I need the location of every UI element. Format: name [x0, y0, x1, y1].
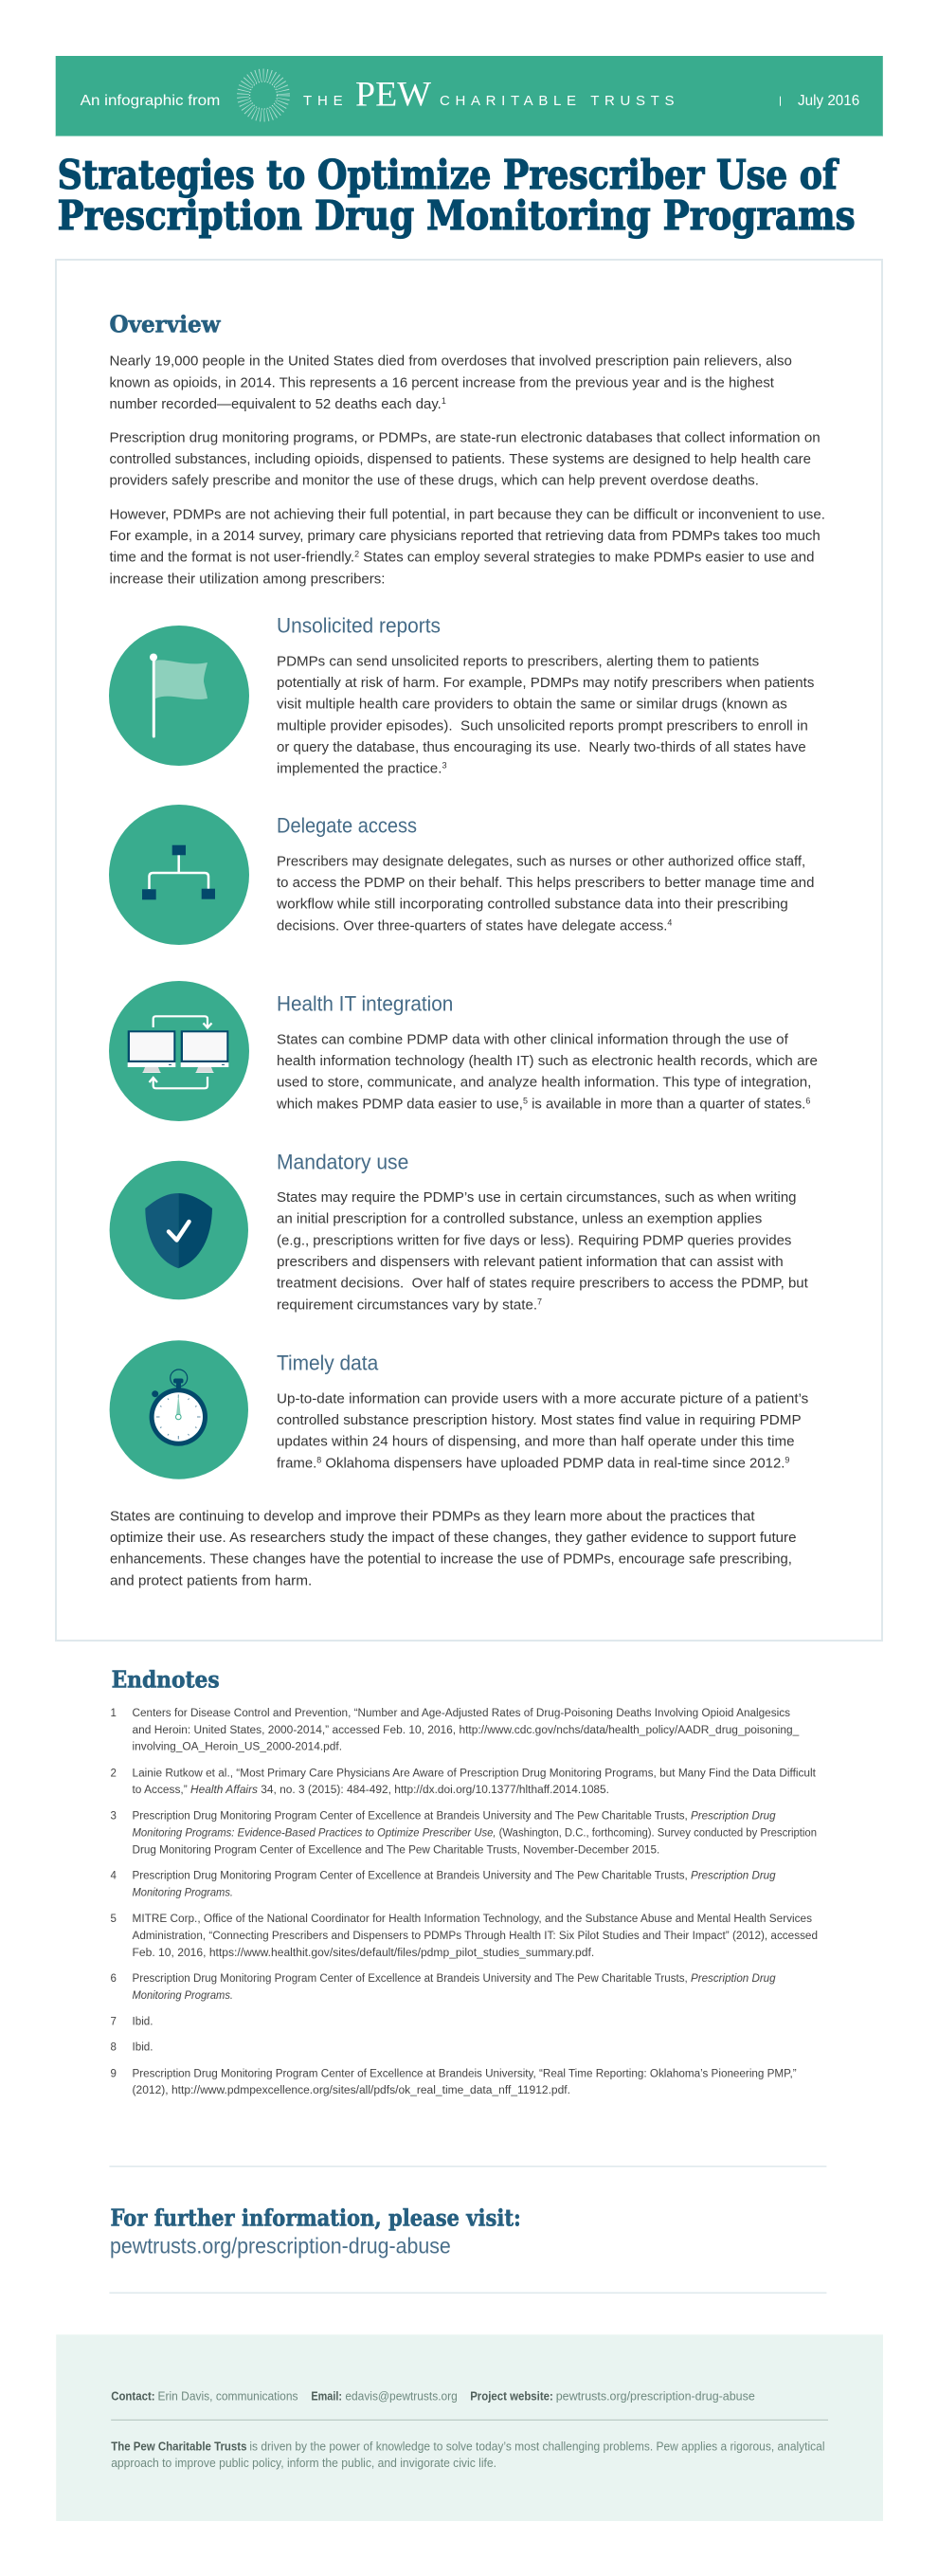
endnote 8: 8 — [110, 2042, 117, 2054]
overview paragraph 3: time and the format is not user-friendly. — [110, 550, 354, 566]
overview paragraph 2: controlled substances, including opioids, dispensed to patients. These systems are designed to help health care — [110, 451, 811, 467]
endnote 2 — [110, 1768, 817, 1796]
about Pew text: is driven by the power of knowledge to solve today’s most challenging problems. Pew applies a rigorous, analytical — [249, 2440, 824, 2453]
body text — [277, 653, 814, 777]
strategy: unsolicited reports — [109, 614, 814, 777]
body text: health information technology (health IT) such as electronic health records, which are — [277, 1053, 818, 1069]
body text: updates within 24 hours of dispensing, and more than half operate under this time — [277, 1434, 794, 1450]
icon: flag — [109, 626, 249, 766]
body text — [277, 1390, 808, 1471]
overview paragraph 2: Prescription drug monitoring programs, or PDMPs, are state-run electronic databases that collect information on — [110, 429, 821, 445]
icon: shield with check — [110, 1161, 248, 1299]
contact line: pewtrusts.org/prescription-drug-abuse — [556, 2389, 755, 2403]
closing paragraph: enhancements. These changes have the potential to increase the use of PDMPs, encourage safe prescribing, — [110, 1551, 792, 1568]
body text: used to store, communicate, and analyze health information. This type of integration, — [277, 1075, 811, 1091]
body text: multiple provider episodes). Such unsolicited reports prompt prescribers to enroll in — [277, 717, 808, 734]
endnote 2: Lainie Rutkow et al., “Most Primary Care Physicians Are Aware of Prescription Drug Monitoring Programs, but Many Find the Data Difficult — [133, 1768, 817, 1779]
body text: 9 — [785, 1455, 789, 1464]
further information block — [110, 2204, 521, 2258]
endnote 4: Monitoring Programs. — [133, 1888, 233, 1899]
further information block: pewtrusts.org/prescription-drug-abuse — [110, 2233, 451, 2258]
contact line: Project website: — [470, 2389, 553, 2403]
endnote 5: 5 — [110, 1914, 117, 1925]
heading: endnotes: Endnotes — [112, 1666, 220, 1694]
endnote 4: 4 — [110, 1871, 117, 1882]
endnote 1: involving_OA_Heroin_US_2000-2014.pdf. — [133, 1742, 342, 1753]
heading: Mandatory use — [277, 1151, 408, 1174]
closing paragraph: and protect patients from harm. — [110, 1572, 312, 1588]
overview paragraph 3 — [110, 506, 825, 587]
overview paragraph 3: However, PDMPs are not achieving their full potential, in part because they can be difficult or inconvenient to use. — [110, 506, 825, 522]
body text: 8 — [316, 1455, 321, 1464]
endnote 3: Drug Monitoring Program Center of Excellence and The Pew Charitable Trusts, November-December 2015. — [133, 1844, 659, 1856]
body text: 6 — [805, 1096, 810, 1105]
body text: PDMPs can send unsolicited reports to prescribers, alerting them to patients — [277, 653, 759, 669]
endnote 6: Prescription Drug Monitoring Program Center of Excellence at Brandeis University and The Pew Charitable Trusts, Prescription Drug — [133, 1973, 776, 1985]
endnote 1: 1 — [110, 1708, 117, 1719]
Pew wordmark — [303, 76, 675, 114]
endnote 1: Centers for Disease Control and Prevention, “Number and Age-Adjusted Rates of Drug-Poisoning Deaths Involving Opioid Analgesics — [133, 1708, 790, 1719]
body text: or query the database, thus encouraging its use. Nearly two-thirds of all states have — [277, 739, 806, 755]
endnote 8 — [110, 2042, 153, 2054]
header banner — [56, 56, 883, 136]
body text: to access the PDMP on their behalf. This helps prescribers to better manage time and — [277, 875, 814, 891]
endnote 8: Ibid. — [133, 2042, 153, 2054]
endnote 9: 9 — [110, 2068, 117, 2079]
overview paragraph 1: number recorded—equivalent to 52 deaths each day. — [110, 396, 443, 412]
overview paragraph 2: providers safely prescribe and monitor the use of these drugs, which can help prevent overdose deaths. — [110, 473, 759, 489]
closing paragraph: optimize their use. As researchers study the impact of these changes, they gather evidence to support future — [110, 1530, 796, 1546]
body text — [276, 853, 814, 934]
strategy: health IT integration — [109, 981, 818, 1121]
endnote 5: MITRE Corp., Office of the National Coordinator for Health Information Technology, and the Substance Abuse and Mental Health Services — [133, 1914, 812, 1925]
body text: Up-to-date information can provide users with a more accurate picture of a patient’s — [277, 1390, 808, 1406]
banner intro text: An infographic from — [81, 93, 220, 109]
banner date: July 2016 — [798, 93, 859, 109]
footer panel — [56, 2334, 883, 2521]
endnote 2: 2 — [110, 1768, 117, 1779]
body text: Oklahoma dispensers have uploaded PDMP data in real-time since 2012. — [321, 1455, 785, 1471]
body text — [276, 1031, 818, 1112]
body text: decisions. Over three-quarters of states have delegate access. — [277, 917, 671, 934]
about Pew text: The Pew Charitable Trusts — [111, 2440, 247, 2453]
about Pew text — [111, 2440, 824, 2470]
icon: org chart — [109, 805, 249, 945]
body text: 7 — [537, 1297, 542, 1306]
Pew wordmark: CHARITABLE TRUSTS — [440, 93, 675, 109]
endnote 2: to Access,” Health Affairs 34, no. 3 (2015): 484-492, http://dx.doi.org/10.1377/hlthaff.2014.1085. — [133, 1785, 609, 1796]
body text: States can combine PDMP data with other clinical information through the use of — [277, 1031, 789, 1047]
body text: (e.g., prescriptions written for five days or less). Requiring PDMP queries provides — [277, 1232, 791, 1248]
Pew wordmark: PEW — [355, 76, 431, 114]
overview paragraph 2 — [110, 429, 821, 489]
endnote 1: and Heroin: United States, 2000-2014,” accessed Feb. 10, 2016, http://www.cdc.gov/nchs/data/health_policy/AADR_drug_poisoning_ — [133, 1725, 800, 1736]
endnote 4: Prescription Drug Monitoring Program Center of Excellence at Brandeis University and The Pew Charitable Trusts, Prescription Drug — [133, 1871, 776, 1882]
endnote 3 — [110, 1810, 817, 1856]
overview paragraph 3: 2 — [354, 550, 359, 559]
heading: Health IT integration — [277, 992, 453, 1016]
endnote 9 — [110, 2068, 797, 2096]
contact line: Contact: — [111, 2389, 155, 2403]
overview paragraph 1: known as opioids, in 2014. This represents a 16 percent increase from the previous year and is the highest — [110, 374, 775, 390]
endnote 6 — [110, 1973, 776, 2002]
body text: controlled substance prescription history. Most states find value in requiring PDMP — [277, 1412, 802, 1428]
body text: frame. — [277, 1455, 317, 1471]
body text: implemented the practice. — [277, 761, 440, 777]
endnote 6: Monitoring Programs. — [133, 1990, 233, 2002]
endnote 4 — [110, 1871, 776, 1899]
overview paragraph 3: States can employ several strategies to make PDMPs easier to use and — [359, 550, 814, 566]
contact line: Email: — [311, 2389, 342, 2403]
endnote 5: Administration, “Connecting Prescribers and Dispensers to PDMPs Through Health IT: Six Pilot Studies and Their Impact” (2012), accessed — [133, 1931, 818, 1942]
icon: stopwatch — [110, 1340, 248, 1479]
contact line: edavis@pewtrusts.org — [345, 2389, 458, 2403]
heading: overview: Overview — [110, 311, 222, 338]
endnote 6: 6 — [110, 1973, 117, 1985]
endnote 9: Prescription Drug Monitoring Program Center of Excellence at Brandeis University, “Real Time Reporting: Oklahoma’s Pioneering PMP,” — [133, 2068, 797, 2079]
strategy: mandatory use — [110, 1151, 809, 1313]
body text: treatment decisions. Over half of states require prescribers to access the PDMP, but — [277, 1276, 809, 1292]
strategy: timely data — [110, 1340, 808, 1479]
endnote 9: (2012), http://www.pdmpexcellence.org/sites/all/pdfs/ok_real_time_data_nff_11912.pdf. — [133, 2085, 570, 2096]
title — [58, 152, 856, 240]
body text: 3 — [442, 761, 447, 771]
body text: visit multiple health care providers to obtain the same or similar drugs (known as — [277, 697, 787, 713]
endnote 7: Ibid. — [133, 2016, 153, 2027]
body text: an initial prescription for a controlled substance, unless an exemption applies — [277, 1211, 762, 1227]
endnote 3: 3 — [110, 1810, 117, 1822]
strategy: delegate access — [109, 805, 814, 945]
overview paragraph 3: increase their utilization among prescribers: — [110, 571, 385, 587]
endnote 3: Prescription Drug Monitoring Program Center of Excellence at Brandeis University and The Pew Charitable Trusts, Prescription Drug — [133, 1810, 776, 1822]
body text: 4 — [667, 917, 672, 927]
endnotes section — [110, 1666, 818, 2096]
body text: potentially at risk of harm. For example, PDMPs may notify prescribers when patients — [277, 675, 814, 691]
endnote 5 — [110, 1914, 818, 1959]
heading: Timely data — [277, 1351, 379, 1374]
body text: is available in more than a quarter of states. — [528, 1096, 805, 1112]
contact line — [111, 2389, 755, 2403]
closing paragraph: States are continuing to develop and improve their PDMPs as they learn more about the practices that — [110, 1508, 755, 1524]
endnote 7 — [110, 2016, 153, 2027]
body text: Prescribers may designate delegates, such as nurses or other authorized office staff, — [277, 853, 805, 869]
further information block: For further information, please visit: — [110, 2204, 521, 2231]
overview paragraph 1: Nearly 19,000 people in the United States died from overdoses that involved prescription pain relievers, also — [110, 354, 792, 370]
body text: which makes PDMP data easier to use, — [277, 1096, 525, 1112]
overview paragraph 1: 1 — [442, 396, 446, 406]
endnote 5: Feb. 10, 2016, https://www.healthit.gov/sites/default/files/pdmp_pilot_studies_summary.pdf. — [133, 1948, 594, 1959]
body text: 5 — [523, 1096, 528, 1105]
overview paragraph 3: For example, in a 2014 survey, primary care physicians reported that retrieving data from PDMPs takes too much — [110, 528, 821, 544]
body text: workflow while still incorporating controlled substance data into their prescribing — [276, 897, 788, 913]
body text: requirement circumstances vary by state. — [277, 1297, 535, 1313]
endnote 3: Monitoring Programs: Evidence-Based Practices to Optimize Prescriber Use, (Washington, D.C., forthcoming). Survey conducted by Prescription — [133, 1827, 817, 1839]
endnote 1 — [110, 1708, 800, 1753]
icon: connected monitors — [109, 981, 249, 1121]
about Pew text: approach to improve public policy, inform the public, and invigorate civic life. — [111, 2457, 496, 2470]
body text: States may require the PDMP’s use in certain circumstances, such as when writing — [277, 1189, 796, 1206]
body text: prescribers and dispensers with relevant patient information that can assist with — [277, 1254, 784, 1270]
icon: Pew sunburst logo — [243, 75, 284, 116]
heading: Unsolicited reports — [277, 614, 441, 638]
overview paragraph 1 — [110, 354, 792, 412]
contact line: Erin Davis, communications — [157, 2389, 298, 2403]
endnote 7: 7 — [110, 2016, 117, 2027]
panel: overview — [56, 260, 882, 1641]
body text — [277, 1189, 809, 1313]
Pew wordmark: THE — [303, 93, 343, 109]
heading: Delegate access — [277, 813, 417, 837]
closing paragraph — [110, 1508, 796, 1588]
